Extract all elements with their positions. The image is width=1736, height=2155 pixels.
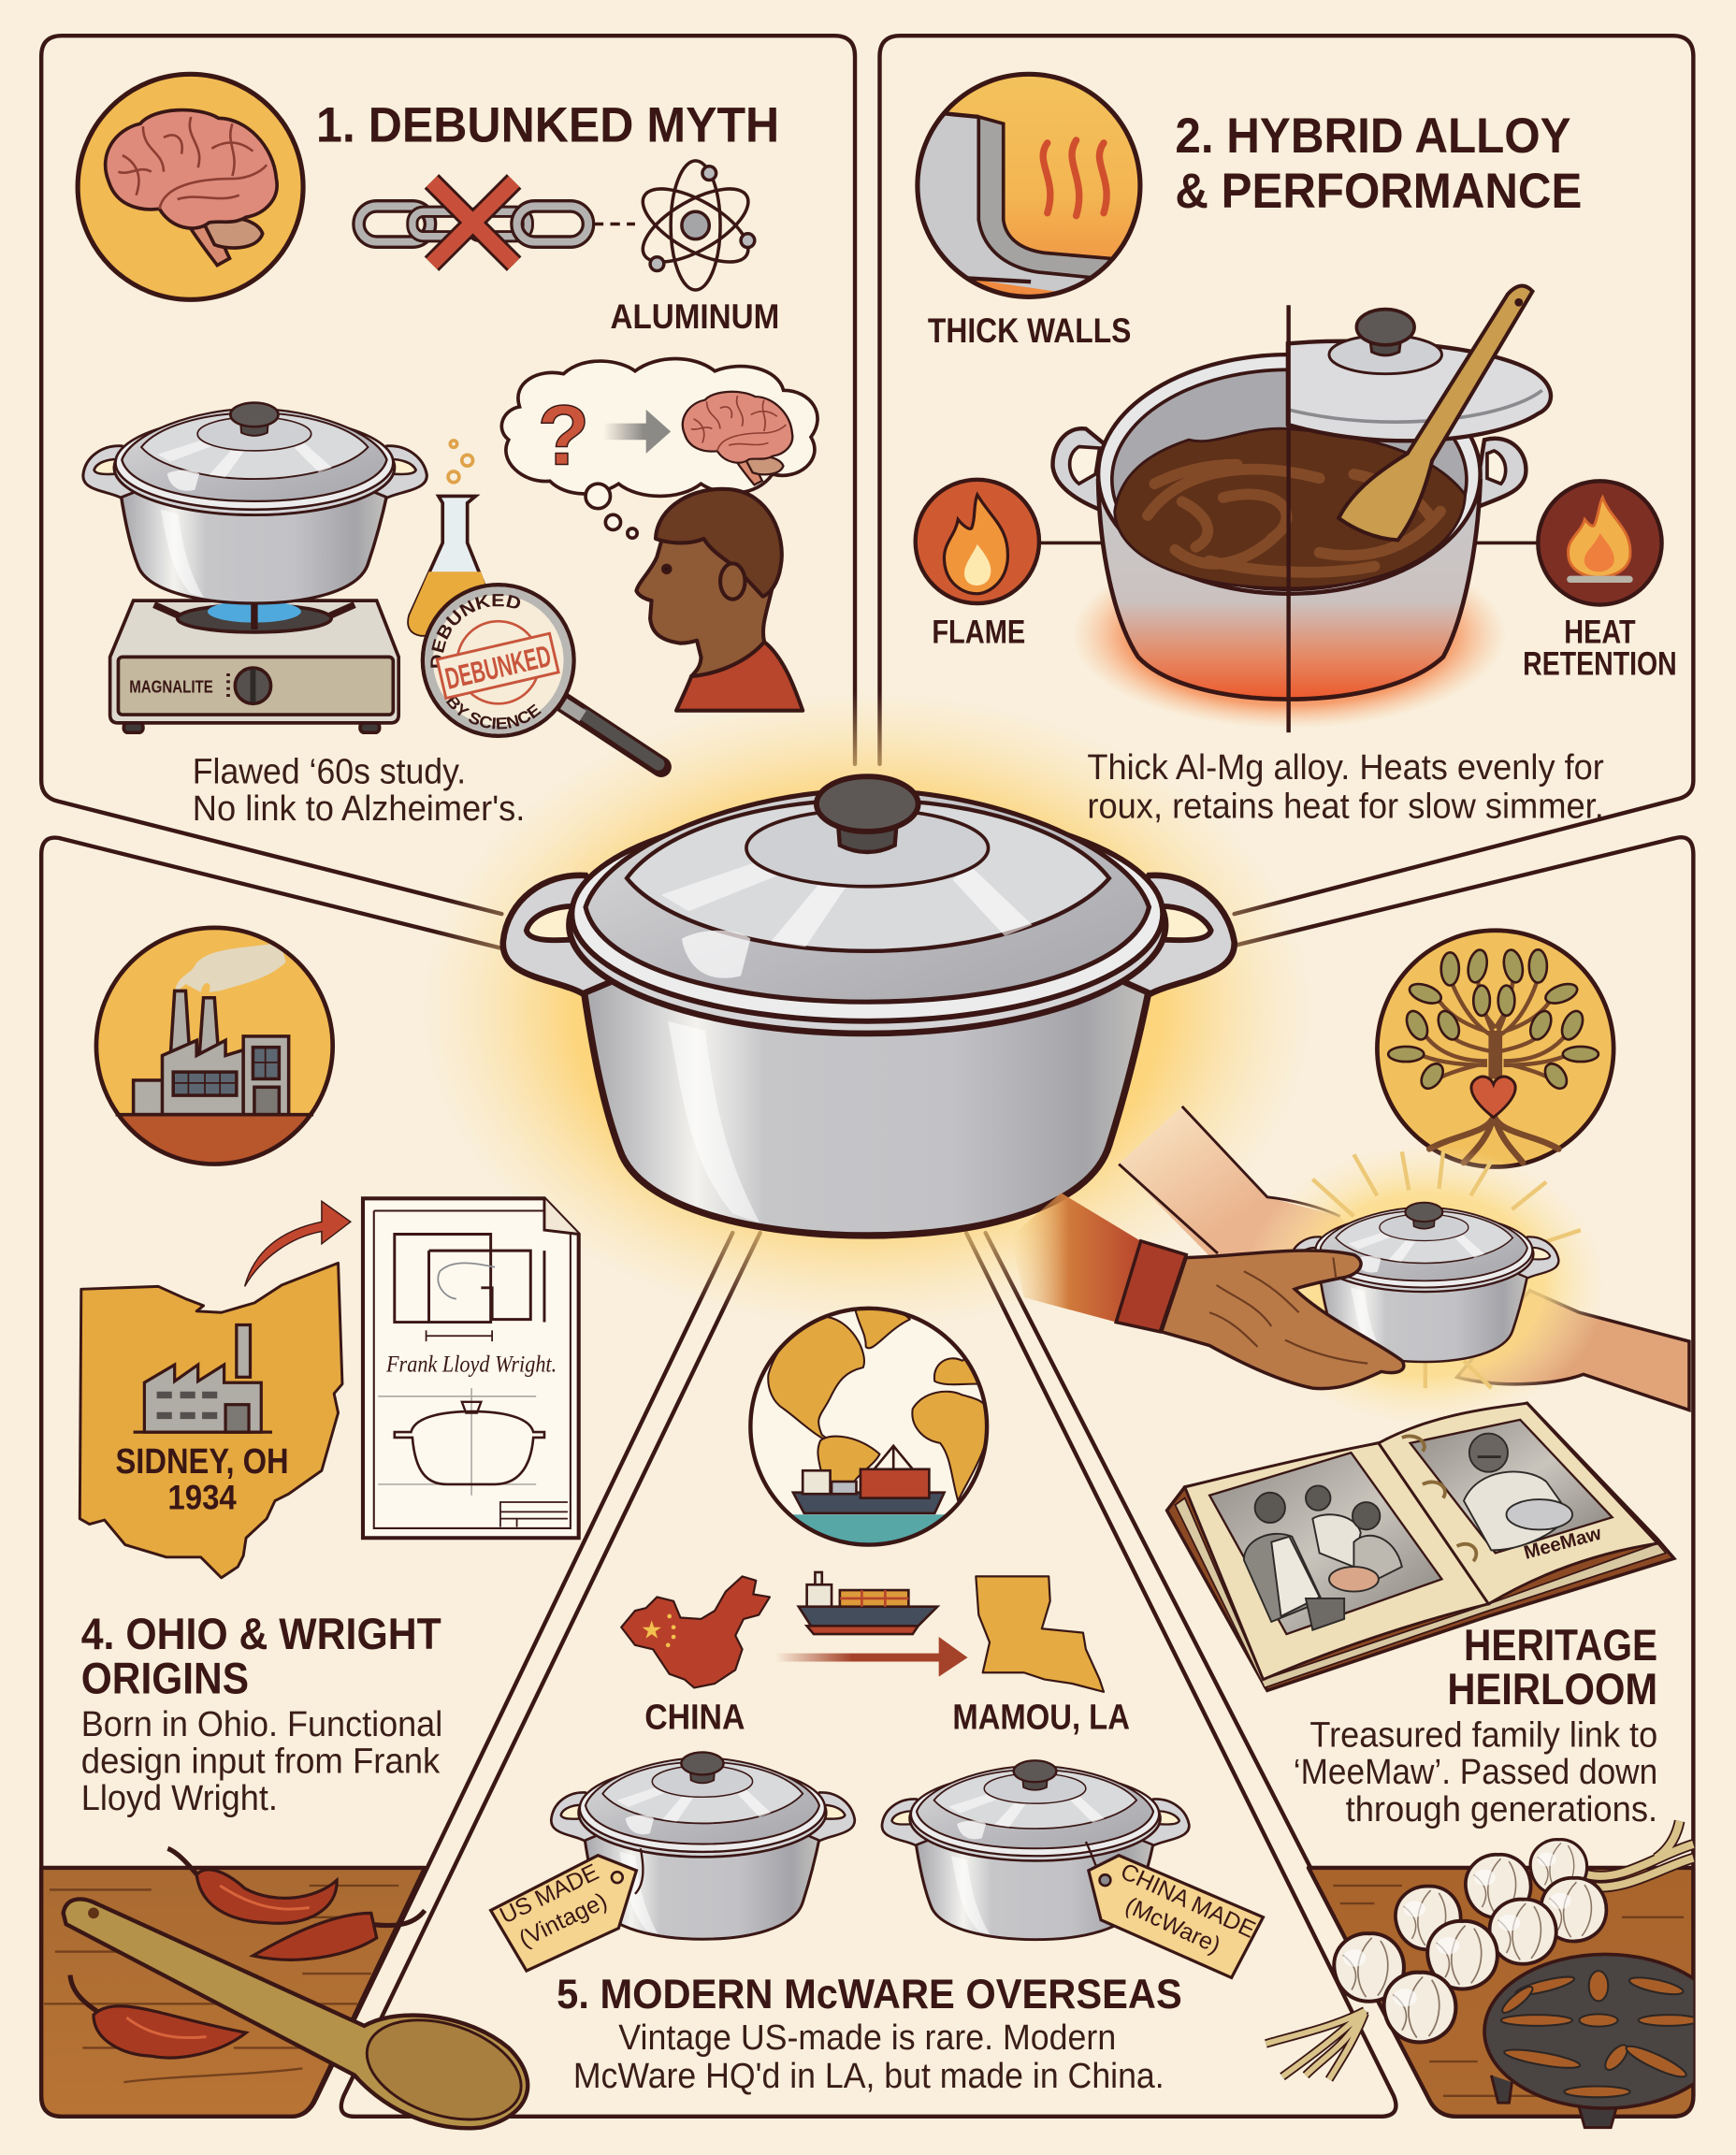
icon: debunked magnifier: DEBUNKED	[430, 594, 520, 668]
body text: alloy	[1087, 747, 1604, 826]
tag: US made	[491, 1848, 643, 1971]
icon: debunked magnifier: DEBUNKED	[442, 639, 554, 696]
labels: China and Mamou	[644, 1697, 1130, 1737]
icon: heat retention badge	[1538, 481, 1662, 605]
tag: US made: (Vintage)	[514, 1887, 611, 1953]
tag: China made	[1086, 1842, 1263, 1977]
panel 3 content	[1010, 931, 1727, 2128]
map: Ohio with factory: SIDNEY, OH	[116, 1441, 289, 1482]
icon: pot on stove	[83, 403, 427, 603]
central aluminum pot	[503, 776, 1235, 1236]
icon: broken chain with red cross	[359, 181, 588, 264]
icon: globe with cargo ship	[748, 1306, 990, 1547]
icon: container ship	[799, 1572, 937, 1634]
body text: heritage	[1294, 1715, 1657, 1830]
icon: debunked magnifier	[421, 583, 672, 777]
panel 4 content	[44, 928, 579, 2137]
central glow	[421, 691, 1314, 1329]
heading: debunked myth: 1. DEBUNKED MYTH	[316, 97, 779, 152]
tag: US made: US MADE	[496, 1859, 603, 1929]
heading: heritage heirloom: HEIRLOOM	[1447, 1664, 1657, 1714]
panel: modern McWare frame	[341, 1233, 1396, 2117]
body text: alloy: Thick Al-Mg alloy. Heats evenly for	[1087, 747, 1604, 788]
map: Ohio with factory	[80, 1263, 342, 1578]
panel: debunked myth frame	[41, 36, 855, 914]
panel: hybrid alloy frame	[879, 36, 1693, 914]
illustration: chili peppers	[70, 1848, 425, 2058]
blueprint page with Wright signature	[363, 1198, 579, 1538]
label: thick walls: THICK WALLS	[928, 311, 1131, 350]
illustration: wooden spoon	[64, 1899, 534, 2137]
heading: Ohio and Wright origins: 4. OHIO & WRIGHT	[81, 1609, 441, 1658]
tag: China made: (McWare)	[1121, 1892, 1224, 1959]
thought bubble: ?	[538, 389, 589, 484]
icon: thick wall cross section	[907, 74, 1148, 310]
labels: China and Mamou: CHINA	[644, 1697, 745, 1737]
illustration: US made pot	[551, 1752, 855, 1939]
illustration: giver sleeve and hand	[1010, 1193, 1404, 1389]
illustration: braided garlic	[1266, 1821, 1693, 2079]
illustration: glowing heirloom pot	[1244, 1145, 1607, 1425]
icon: brain badge	[78, 74, 303, 299]
illustration: trivet	[1483, 1953, 1693, 2129]
wooden table right	[1309, 1868, 1693, 2117]
panel: Ohio and Wright frame	[41, 838, 732, 2117]
blueprint page with Wright signature: Frank Lloyd Wright.	[385, 1352, 557, 1377]
wood grain right table	[1333, 1886, 1684, 2096]
label: aluminum: ALUMINUM	[610, 297, 779, 336]
body text: flawed study	[193, 752, 525, 829]
body text: flawed study: No link to Alzheimer's.	[193, 788, 525, 829]
flame connector lines	[1040, 542, 1537, 544]
heading: hybrid alloy and performance: & PERFORMANCE	[1175, 164, 1582, 219]
body text: McWare	[573, 2018, 1165, 2096]
body text: heritage: through generations.	[1346, 1789, 1657, 1830]
body text: Ohio: Lloyd Wright.	[81, 1778, 278, 1818]
map: China: ★	[641, 1616, 663, 1644]
panel 1 content	[75, 71, 819, 829]
panel 5 content	[491, 1307, 1263, 2096]
heading: Ohio and Wright origins: ORIGINS	[81, 1653, 249, 1702]
icon: debunked magnifier: BY SCIENCE	[445, 698, 542, 730]
panel 2 content	[907, 74, 1677, 826]
heading: modern McWare overseas: 5. MODERN McWARE OVERSEAS	[557, 1972, 1182, 2018]
tag: China made: CHINA MADE	[1117, 1859, 1259, 1944]
illustration: thinking man	[636, 489, 803, 711]
panel: heritage heirloom frame	[986, 837, 1693, 2117]
illustration: photo album	[1167, 1403, 1674, 1690]
illustration: photo album: MeeMaw	[1522, 1522, 1604, 1564]
illustration: receiver forearm and hand	[1119, 1106, 1689, 1410]
arrow: China to Louisiana	[775, 1637, 968, 1677]
labels: flame and heat retention: FLAME	[932, 615, 1025, 651]
labels: China and Mamou: MAMOU, LA	[952, 1697, 1130, 1737]
illustration: half open pot with roux	[1053, 286, 1551, 729]
body text: heritage: Treasured family link to	[1309, 1715, 1657, 1756]
icon: family tree badge	[1377, 931, 1613, 1167]
thought bubble	[501, 359, 817, 538]
map: Louisiana	[976, 1576, 1104, 1692]
icon: flame badge	[916, 480, 1039, 603]
icon: factory badge	[94, 926, 335, 1166]
body text: flawed study: Flawed ‘60s study.	[193, 752, 466, 792]
wooden table left	[41, 1868, 425, 2117]
heading: hybrid alloy and performance	[1175, 108, 1582, 219]
labels: flame and heat retention: HEAT	[1564, 615, 1636, 651]
body text: alloy: roux, retains heat for slow simmer.	[1087, 786, 1604, 826]
body text: Ohio	[81, 1704, 442, 1818]
map: China	[621, 1576, 770, 1687]
heading: Ohio and Wright origins	[81, 1609, 441, 1702]
labels: flame and heat retention	[932, 615, 1677, 682]
wood grain left table	[44, 1886, 398, 2082]
heading: heritage heirloom: HERITAGE	[1464, 1620, 1657, 1670]
map: Ohio with factory: 1934	[167, 1478, 237, 1516]
body text: McWare: McWare HQ'd in LA, but made in China.	[573, 2056, 1165, 2096]
heading: heritage heirloom	[1447, 1620, 1657, 1714]
body text: Ohio: Born in Ohio. Functional	[81, 1704, 442, 1744]
illustration: China made pot	[882, 1760, 1189, 1940]
labels: flame and heat retention: RETENTION	[1523, 645, 1677, 682]
divider line through pot	[1287, 305, 1290, 732]
icon: gas stove: MAGNALITE	[129, 677, 213, 697]
arrow: Ohio to Wright	[245, 1201, 351, 1286]
body text: McWare: Vintage US-made is rare. Modern	[618, 2018, 1116, 2058]
body text: Ohio: design input from Frank	[81, 1742, 441, 1782]
icon: flask with bubbles	[409, 441, 492, 635]
heading: hybrid alloy and performance: 2. HYBRID ALLOY	[1175, 108, 1571, 164]
icon: gas stove	[110, 600, 398, 732]
icon: aluminum atom	[594, 161, 760, 290]
body text: heritage: ‘MeeMaw’. Passed down	[1294, 1752, 1657, 1792]
